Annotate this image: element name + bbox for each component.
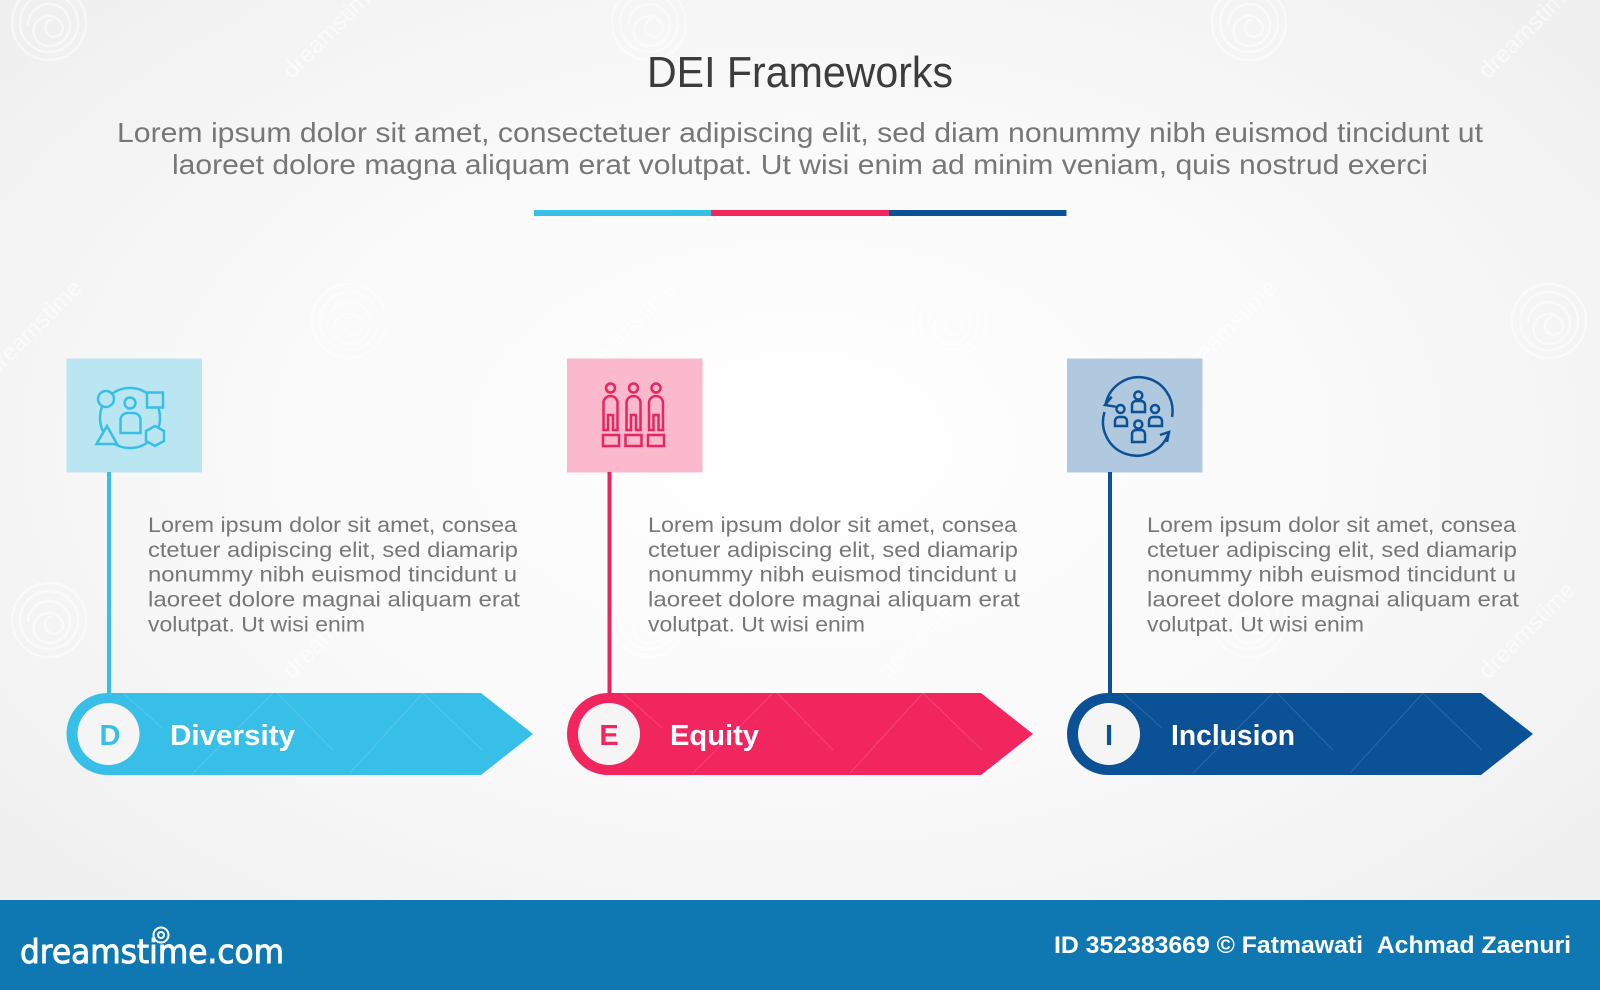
banner label: Diversity	[170, 720, 295, 752]
arrow banner	[1067, 693, 1533, 775]
watermark pattern: dreamstime	[1175, 274, 1283, 382]
watermark pattern	[0, 0, 1586, 684]
description text	[1147, 514, 1519, 636]
arrow banner	[66, 693, 533, 775]
footer bar	[0, 900, 1600, 990]
description text: ctetuer adipiscing elit, sed diamarip	[1147, 539, 1517, 562]
connector line	[1108, 472, 1112, 694]
banner label: Equity	[670, 720, 759, 752]
subtitle text: Lorem ipsum dolor sit amet, consectetuer adipiscing elit, sed diam nonummy nibh euismod tincidunt ut	[117, 117, 1483, 148]
connector line	[608, 472, 612, 694]
panel: inclusion	[1067, 358, 1533, 775]
description text: ctetuer adipiscing elit, sed diamarip	[648, 539, 1018, 562]
description text: volutpat. Ut wisi enim	[1147, 614, 1364, 636]
description text: volutpat. Ut wisi enim	[648, 614, 865, 636]
description text: nonummy nibh euismod tincidunt u	[648, 564, 1017, 586]
description text: Lorem ipsum dolor sit amet, consea	[648, 514, 1017, 537]
letter badge	[78, 703, 140, 765]
connector line	[107, 472, 111, 694]
footer credit: ID 352383669 © Fatmawati Achmad Zaenuri	[1054, 932, 1571, 959]
description text: volutpat. Ut wisi enim	[148, 614, 365, 636]
watermark pattern: dreamstime	[277, 576, 385, 684]
icon tile: inclusion	[1067, 358, 1202, 472]
watermark pattern: dreamstime	[575, 274, 683, 382]
tri-colour divider	[534, 210, 1066, 216]
description text: nonummy nibh euismod tincidunt u	[148, 564, 517, 586]
description text: laoreet dolore magnai aliquam erat	[148, 588, 520, 612]
watermark pattern: dreamstime	[873, 576, 981, 684]
letter badge	[1078, 703, 1140, 765]
description text: ctetuer adipiscing elit, sed diamarip	[148, 539, 518, 562]
description text: laoreet dolore magnai aliquam erat	[1147, 588, 1519, 612]
panel: equity	[567, 358, 1033, 775]
subtitle text	[117, 117, 1483, 180]
description text	[648, 514, 1020, 636]
letter badge: E	[599, 720, 619, 752]
letter badge	[578, 703, 640, 765]
description text: laoreet dolore magnai aliquam erat	[648, 588, 1020, 612]
description text	[148, 514, 520, 636]
icon tile: equity	[567, 358, 702, 472]
icon tile: diversity	[66, 358, 202, 472]
description text: Lorem ipsum dolor sit amet, consea	[1147, 514, 1516, 537]
banner label: Inclusion	[1171, 720, 1295, 752]
arrow banner	[567, 693, 1033, 775]
letter badge: D	[100, 720, 120, 752]
title: DEI Frameworks	[647, 48, 953, 97]
watermark pattern: dreamstime	[1473, 576, 1581, 684]
description text: nonummy nibh euismod tincidunt u	[1147, 564, 1516, 586]
footer logo: dreamstime.com	[20, 932, 284, 971]
description text: Lorem ipsum dolor sit amet, consea	[148, 514, 517, 537]
panel: diversity	[66, 358, 533, 775]
subtitle text: laoreet dolore magna aliquam erat volutpat. Ut wisi enim ad minim veniam, quis nostrud exerci	[172, 149, 1428, 180]
letter badge: I	[1105, 720, 1113, 752]
